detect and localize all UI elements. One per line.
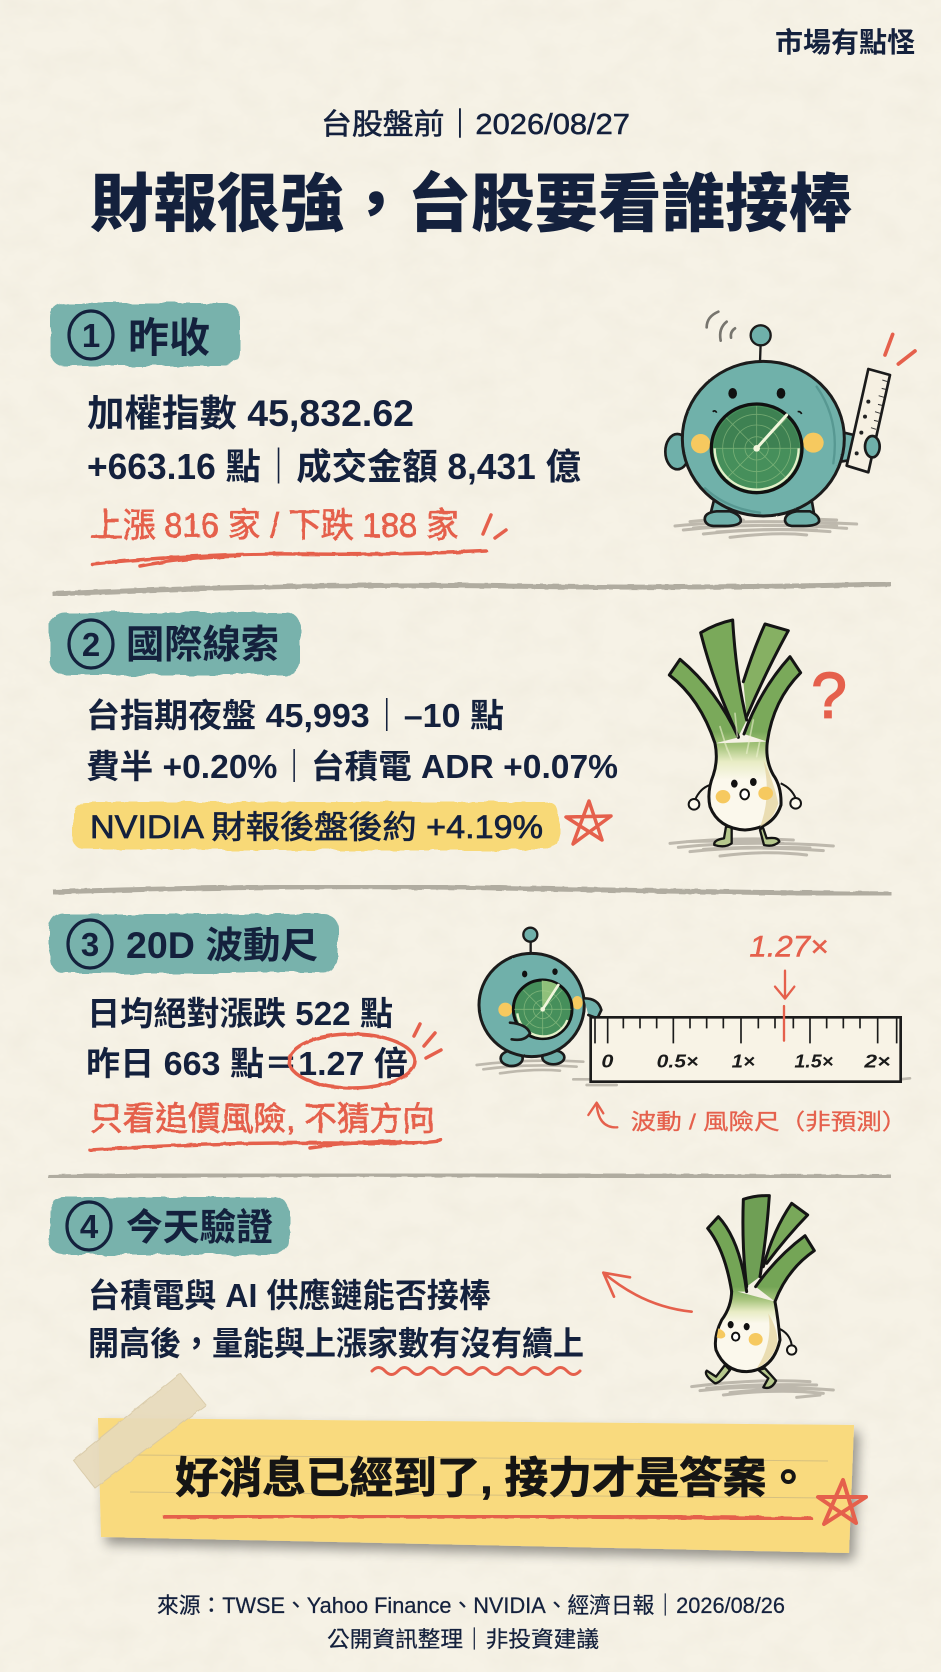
handwritten breadth note: 上漲 816 家 / 下跌 188 家 xyxy=(90,507,459,545)
divider xyxy=(53,887,891,894)
body shading xyxy=(705,387,835,513)
red arrow xyxy=(603,1273,692,1312)
note rules xyxy=(130,1455,828,1498)
feet xyxy=(705,500,819,526)
robot arms xyxy=(510,998,601,1040)
TSMC and AI supply chain line: 台積電與 AI 供應鏈能否接棒 xyxy=(88,1277,491,1314)
ruler labels: 2× xyxy=(863,1050,890,1071)
icon: radar robot with ruler xyxy=(665,312,915,537)
divider xyxy=(53,584,891,594)
average move line: 日均絕對漲跌 522 點 xyxy=(87,995,393,1032)
panel: section 4 today's check xyxy=(49,1197,584,1374)
multiple line: 昨日 663 點＝1.27 倍 xyxy=(86,1045,408,1082)
red underline xyxy=(165,1516,811,1519)
chart: volatility ruler with robot xyxy=(477,928,910,1134)
ground shadow xyxy=(675,518,857,537)
right hand xyxy=(865,436,880,457)
ruler labels xyxy=(601,1050,890,1071)
signal waves xyxy=(707,312,735,341)
leaf streaks xyxy=(720,713,760,760)
front leaves xyxy=(669,657,801,743)
ruler labels: 1× xyxy=(732,1050,755,1071)
cheeks xyxy=(691,433,824,453)
robot cheeks xyxy=(498,996,583,1017)
red circle xyxy=(289,1034,415,1088)
icon: star xyxy=(566,801,611,844)
face xyxy=(717,1321,763,1346)
radar screen xyxy=(711,404,802,493)
ground shadow xyxy=(692,1381,833,1397)
face xyxy=(716,778,773,803)
left arm xyxy=(665,434,689,469)
heading pill: 國際線索: 2 xyxy=(82,626,100,663)
emphasis ticks xyxy=(414,1024,441,1058)
marker arrow xyxy=(775,971,794,999)
ruler labels: 0 xyxy=(601,1050,614,1071)
brand label: 市場有點怪 xyxy=(775,27,915,58)
bulb shading xyxy=(760,760,778,827)
arms xyxy=(689,783,801,810)
heading pill: 國際線索: 國際線索 xyxy=(126,624,279,667)
right arm xyxy=(840,432,854,462)
panel: section 3 volatility ruler xyxy=(50,914,441,1150)
back leaves xyxy=(743,1196,808,1287)
heading pill: 20D 波動尺: 3 xyxy=(81,926,99,963)
ruler caption: 波動 / 風險尺（非預測） xyxy=(631,1109,907,1134)
change and turnover: +663.16 點｜成交金額 8,431 億 xyxy=(87,446,581,487)
icon: star xyxy=(818,1480,866,1524)
body xyxy=(682,361,844,516)
ruler labels: 0.5× xyxy=(657,1050,698,1071)
heading pill: 今天驗證: 今天驗證 xyxy=(126,1207,273,1248)
heading pill: 昨收 xyxy=(50,303,240,366)
bulb xyxy=(709,742,781,830)
emphasis ticks xyxy=(483,515,506,538)
front leaves xyxy=(708,1217,814,1302)
robot eyes xyxy=(522,968,558,977)
icon: puzzled leek xyxy=(669,620,847,856)
ruler labels: 1.5× xyxy=(794,1050,833,1071)
heading pill: 20D 波動尺 xyxy=(50,914,338,973)
divider xyxy=(48,1174,891,1177)
ground shadow xyxy=(670,839,833,856)
panel: section 1 yesterday close xyxy=(50,303,581,566)
red wavy underline xyxy=(372,1368,580,1374)
heading pill: 國際線索 xyxy=(50,612,300,675)
kicker: date line: 台股盤前｜2026/08/27 xyxy=(321,108,630,141)
panel: section 2 international cues xyxy=(50,612,618,850)
callout: yellow note xyxy=(73,1373,866,1553)
heading pill: 20D 波動尺: 20D 波動尺 xyxy=(126,925,318,966)
legs and feet xyxy=(714,827,779,846)
robot body xyxy=(479,953,584,1057)
red underline xyxy=(90,1140,441,1150)
heading pill: 今天驗證 xyxy=(49,1197,289,1255)
ground shadow xyxy=(477,1061,910,1085)
marker label 1.27x: 1.27× xyxy=(749,931,828,964)
disclaimer: 公開資訊整理｜非投資建議 xyxy=(327,1627,599,1652)
bulb xyxy=(715,1290,780,1372)
robot feet xyxy=(501,1050,564,1066)
NVIDIA highlight xyxy=(73,802,559,850)
question mark: ? xyxy=(811,659,847,731)
NVIDIA highlight: NVIDIA 財報後盤後約 +4.19% xyxy=(90,809,543,845)
tape xyxy=(73,1373,206,1488)
ruler xyxy=(847,369,890,472)
source line: 來源：TWSE、Yahoo Finance、NVIDIA、經濟日報｜2026/08/26 xyxy=(157,1593,785,1618)
red underline xyxy=(92,551,486,566)
ruler ticks xyxy=(595,1018,897,1043)
volume and breadth line: 開高後，量能與上漲家數有沒有續上 xyxy=(88,1325,584,1362)
bulb shading xyxy=(757,1313,777,1368)
alert ticks xyxy=(885,334,915,364)
robot antenna xyxy=(523,928,537,953)
note paper xyxy=(98,1418,854,1553)
arm and hand xyxy=(778,1328,796,1355)
antenna xyxy=(751,325,771,362)
curved arrow xyxy=(588,1103,617,1127)
back leaves xyxy=(701,620,788,737)
marker tick xyxy=(780,1006,787,1041)
icon: walking leek with arrow xyxy=(603,1196,833,1397)
handwritten risk note: 只看追價風險, 不猜方向 xyxy=(90,1100,435,1137)
legs and feet xyxy=(706,1365,776,1388)
heading pill: 昨收: 1 xyxy=(82,317,100,354)
heading pill: 昨收: 昨收 xyxy=(128,315,210,361)
SOX and TSMC ADR line: 費半 +0.20%｜台積電 ADR +0.07% xyxy=(86,748,618,785)
futures line: 台指期夜盤 45,993｜–10 點 xyxy=(86,697,504,734)
ruler body xyxy=(591,1017,901,1082)
title: 財報很強，台股要看誰接棒 xyxy=(90,169,852,240)
heading pill: 今天驗證: 4 xyxy=(80,1208,99,1245)
index level: 加權指數 45,832.62 xyxy=(87,393,414,434)
conclusion text: 好消息已經到了, 接力才是答案。 xyxy=(175,1455,810,1503)
robot radar xyxy=(513,980,572,1039)
eyes xyxy=(713,388,802,414)
